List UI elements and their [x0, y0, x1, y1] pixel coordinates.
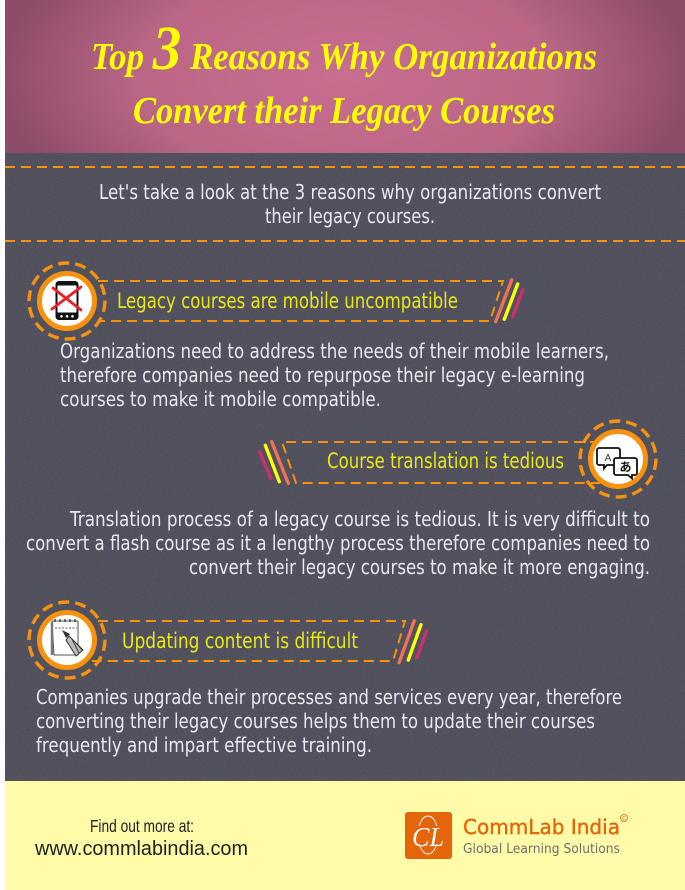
- panel: dark textured background: [5, 153, 685, 781]
- icon: translation speech bubbles: あ: [619, 458, 632, 475]
- banner: reason 1 heading: Legacy courses are mobile uncompatible: [117, 289, 458, 313]
- text: find out more: [34, 816, 248, 860]
- text: reason 3 body: frequently and impart effective training.: [36, 733, 372, 757]
- title: Convert their Legacy Courses: [133, 90, 555, 132]
- text: reason 1 body: courses to make it mobile compatible.: [60, 387, 381, 411]
- banner: reason 3 heading: Updating content is difficult: [122, 629, 358, 653]
- icon: crossed-out mobile phone: [29, 263, 105, 339]
- text: find out more: www.commlabindia.com: [34, 838, 248, 860]
- logo: CommLab India: [405, 812, 628, 859]
- text: reason 2 body: [26, 507, 650, 579]
- logo: CommLab India: CL: [412, 822, 444, 852]
- icon: translation speech bubbles: A: [605, 453, 612, 464]
- panel: footer: [5, 781, 685, 890]
- intro text block: their legacy courses.: [265, 204, 435, 228]
- panel: reason 2: [26, 421, 656, 579]
- text: reason 3 body: [36, 685, 622, 757]
- text: find out more: Find out more at:: [90, 816, 194, 836]
- icon: translation speech bubbles: [580, 421, 656, 497]
- text: reason 1 body: [60, 339, 609, 411]
- panel: title banner: [5, 0, 685, 153]
- logo: CommLab India: C: [622, 816, 626, 822]
- banner: reason 3 heading: [88, 621, 427, 663]
- logo: CommLab India: Global Learning Solutions: [463, 841, 620, 857]
- banner: reason 1 heading: [98, 280, 523, 322]
- logo: CommLab India: CommLab India: [463, 815, 620, 839]
- intro text block: [5, 167, 685, 241]
- title: [91, 15, 597, 132]
- icon: notepad and pencil: [29, 602, 105, 678]
- title: Top 3 Reasons Why Organizations: [91, 15, 597, 83]
- banner: reason 2 heading: Course translation is tedious: [327, 449, 564, 473]
- banner: reason 2 heading: [260, 442, 600, 483]
- panel: reason 3: [29, 602, 622, 757]
- panel: reason 1: [29, 263, 609, 411]
